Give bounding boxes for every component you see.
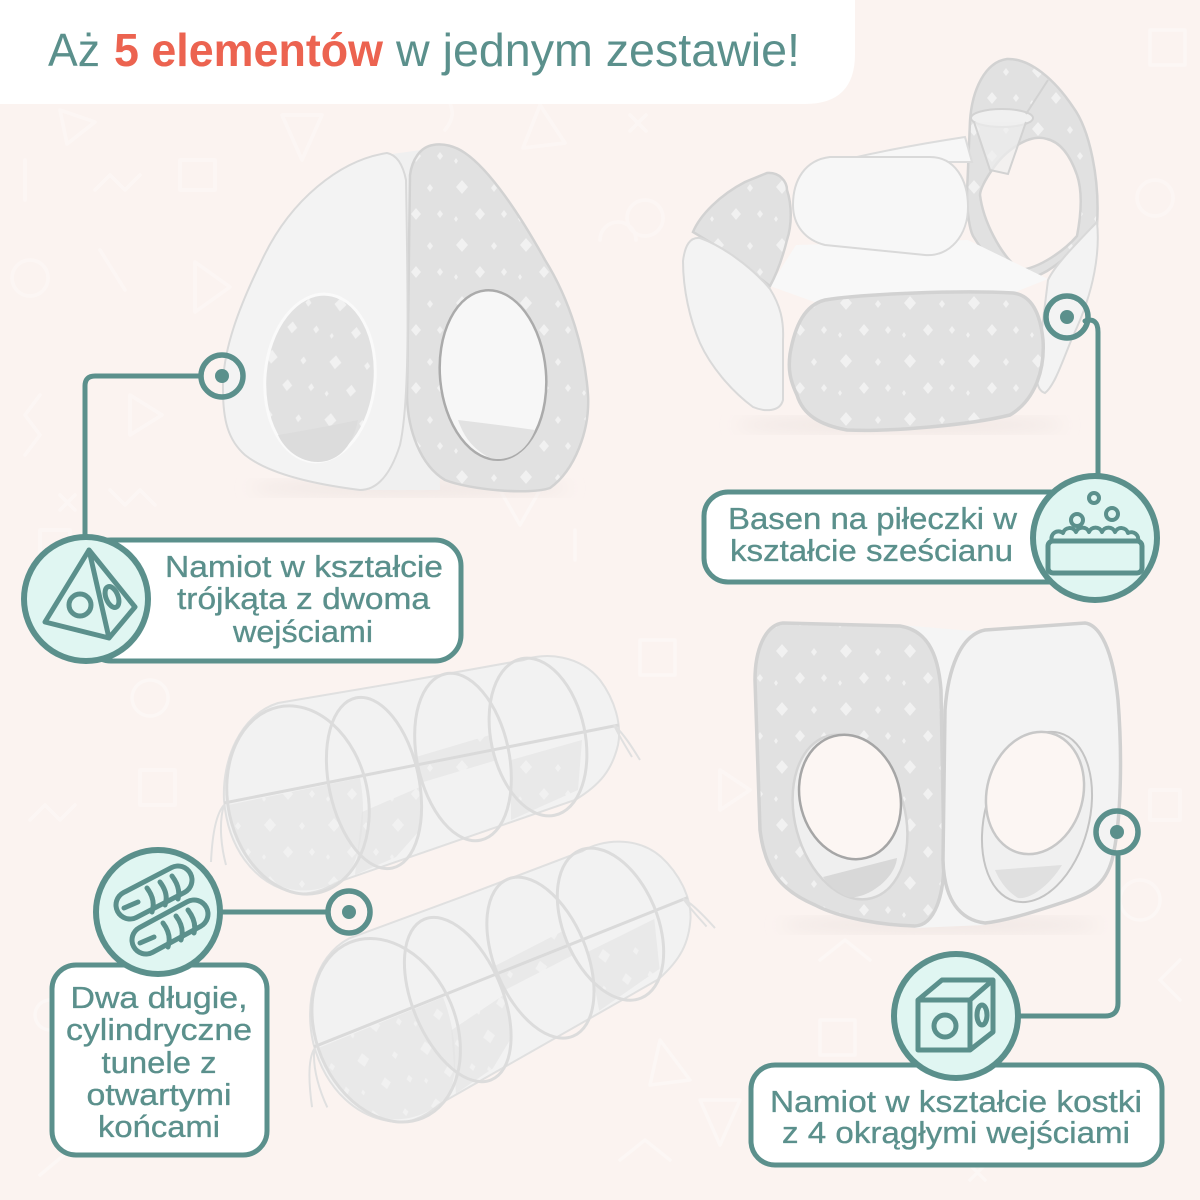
cords bbox=[211, 725, 640, 865]
back white panel bbox=[793, 157, 968, 255]
leader line bbox=[85, 376, 201, 540]
tent left window bbox=[258, 290, 382, 466]
icon: pyramid bbox=[24, 537, 148, 661]
seam bbox=[224, 725, 619, 803]
right white panel bbox=[1037, 222, 1098, 393]
callout text: tunele z bbox=[102, 1045, 216, 1080]
tunnel photo 1 bbox=[210, 649, 640, 907]
cube tent photo bbox=[755, 623, 1120, 933]
callout text: trójkąta z dwoma bbox=[177, 581, 431, 616]
title bar: w jednym zestawie! bbox=[395, 24, 800, 76]
text box bbox=[751, 1065, 1162, 1165]
left gray panel bbox=[693, 173, 791, 286]
triangle tent photo bbox=[223, 144, 588, 496]
cube right panel bbox=[943, 623, 1120, 923]
callout: tunnels bbox=[52, 850, 370, 1155]
callout: ball pool bbox=[704, 296, 1157, 600]
leader line bbox=[222, 910, 328, 914]
hoops bbox=[210, 649, 601, 907]
marker bbox=[201, 355, 243, 397]
tunnel photo 2 bbox=[272, 819, 742, 1152]
text box bbox=[52, 965, 267, 1155]
leader line bbox=[1085, 320, 1098, 476]
callout: triangle tent bbox=[24, 355, 461, 661]
callout text bbox=[728, 501, 1018, 568]
left white panel bbox=[683, 238, 783, 410]
title bar: Aż bbox=[48, 24, 100, 76]
callout text: cylindryczne bbox=[66, 1012, 252, 1047]
marker bbox=[1096, 811, 1138, 853]
title bar: 5 elementów bbox=[114, 24, 383, 76]
back connector bbox=[820, 137, 972, 166]
text box bbox=[704, 492, 1104, 582]
callout text bbox=[770, 1084, 1142, 1150]
hoop arch bbox=[967, 59, 1098, 279]
marker bbox=[1046, 296, 1088, 338]
callout text: wejściami bbox=[232, 614, 373, 649]
callout text: Dwa długie, bbox=[70, 980, 248, 1015]
icon: two tunnels bbox=[96, 850, 220, 974]
gray fabric areas bbox=[228, 735, 582, 891]
callout text: Basen na piłeczki w bbox=[728, 501, 1018, 536]
front gray panel bbox=[789, 292, 1043, 430]
callout text: końcami bbox=[98, 1109, 220, 1144]
callout text: Namiot w kształcie kostki bbox=[770, 1084, 1142, 1119]
callout text: kształcie sześcianu bbox=[730, 533, 1013, 568]
callout text: otwartymi bbox=[86, 1077, 232, 1112]
tent right panel bbox=[407, 144, 588, 491]
pool photo bbox=[683, 59, 1098, 433]
title bar bbox=[0, 0, 855, 104]
pool floor bbox=[770, 240, 1048, 304]
callout text: Namiot w kształcie bbox=[165, 549, 443, 584]
icon: ball tub bbox=[1033, 476, 1157, 600]
callout text bbox=[66, 980, 252, 1144]
cube left panel bbox=[755, 623, 944, 926]
hoop bbox=[971, 80, 1048, 174]
callout text bbox=[165, 549, 443, 649]
marker bbox=[328, 891, 370, 933]
cube right door bbox=[964, 720, 1110, 914]
icon: cube bbox=[894, 954, 1018, 1078]
leader line bbox=[1018, 853, 1118, 1016]
tent right window bbox=[433, 286, 553, 464]
tunnel body bbox=[224, 656, 619, 894]
callout text: z 4 okrągłymi wejściami bbox=[782, 1115, 1130, 1150]
tent left panel bbox=[223, 153, 408, 490]
callout: cube tent bbox=[751, 811, 1162, 1165]
cube left door bbox=[775, 722, 925, 912]
text box bbox=[85, 540, 461, 661]
